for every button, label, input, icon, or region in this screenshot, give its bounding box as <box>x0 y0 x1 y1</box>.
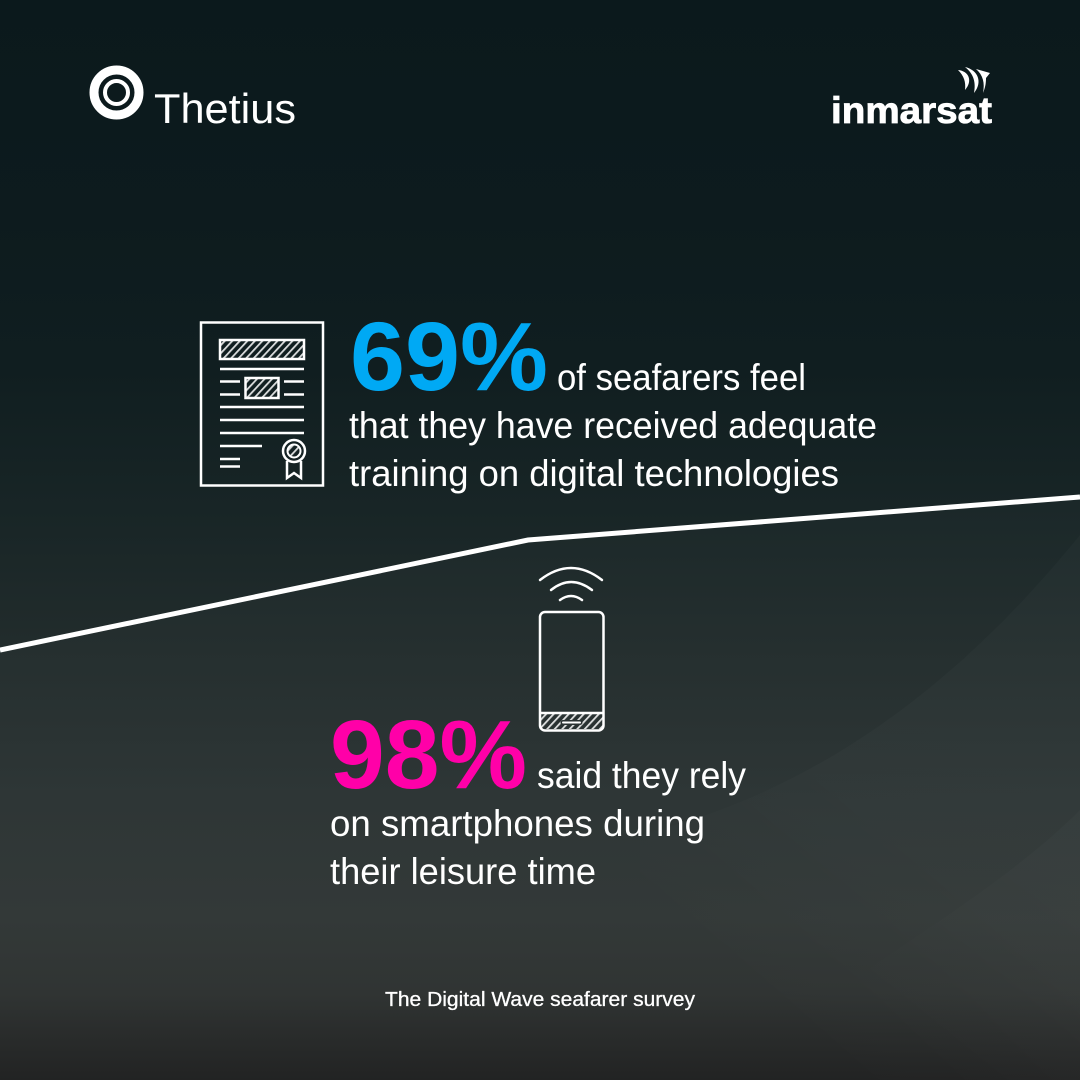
text block: 98% description: said they rely <box>537 755 746 796</box>
background wave lower <box>860 810 1080 1080</box>
icon: inmarsat signal arcs <box>958 67 990 93</box>
stat figure: 69%: 69% <box>350 302 548 411</box>
text block: 69% description: of seafarers feel <box>557 357 806 398</box>
icon: smartphone with wifi <box>540 568 604 730</box>
icon: wifi arcs <box>540 568 602 600</box>
source footer: The Digital Wave seafarer survey <box>385 989 695 1011</box>
text block: 98% description <box>330 755 746 892</box>
text block: 98% description: their leisure time <box>330 851 596 892</box>
stat: 98% rely on smartphones <box>330 700 746 892</box>
icon: phone body <box>540 612 604 730</box>
stat figure: 98%: 98% <box>330 700 527 809</box>
icon: Thetius rings <box>94 70 139 115</box>
wordmark: Thetius: Thetius <box>154 85 296 132</box>
background wave <box>640 535 1080 1080</box>
logo: inmarsat <box>831 67 992 131</box>
text block: 69% description: training on digital technologies <box>349 453 839 494</box>
wordmark: inmarsat: inmarsat <box>831 90 992 131</box>
logo: Thetius <box>94 70 296 132</box>
text block: 98% description: on smartphones during <box>330 803 705 844</box>
divider line <box>0 497 1080 650</box>
text block: 69% description: that they have received adequate <box>349 405 877 446</box>
text block: 69% description <box>349 357 877 494</box>
lower panel <box>0 497 1080 1080</box>
stat: 69% of seafarers <box>349 302 877 494</box>
icon: certificate <box>201 322 323 486</box>
